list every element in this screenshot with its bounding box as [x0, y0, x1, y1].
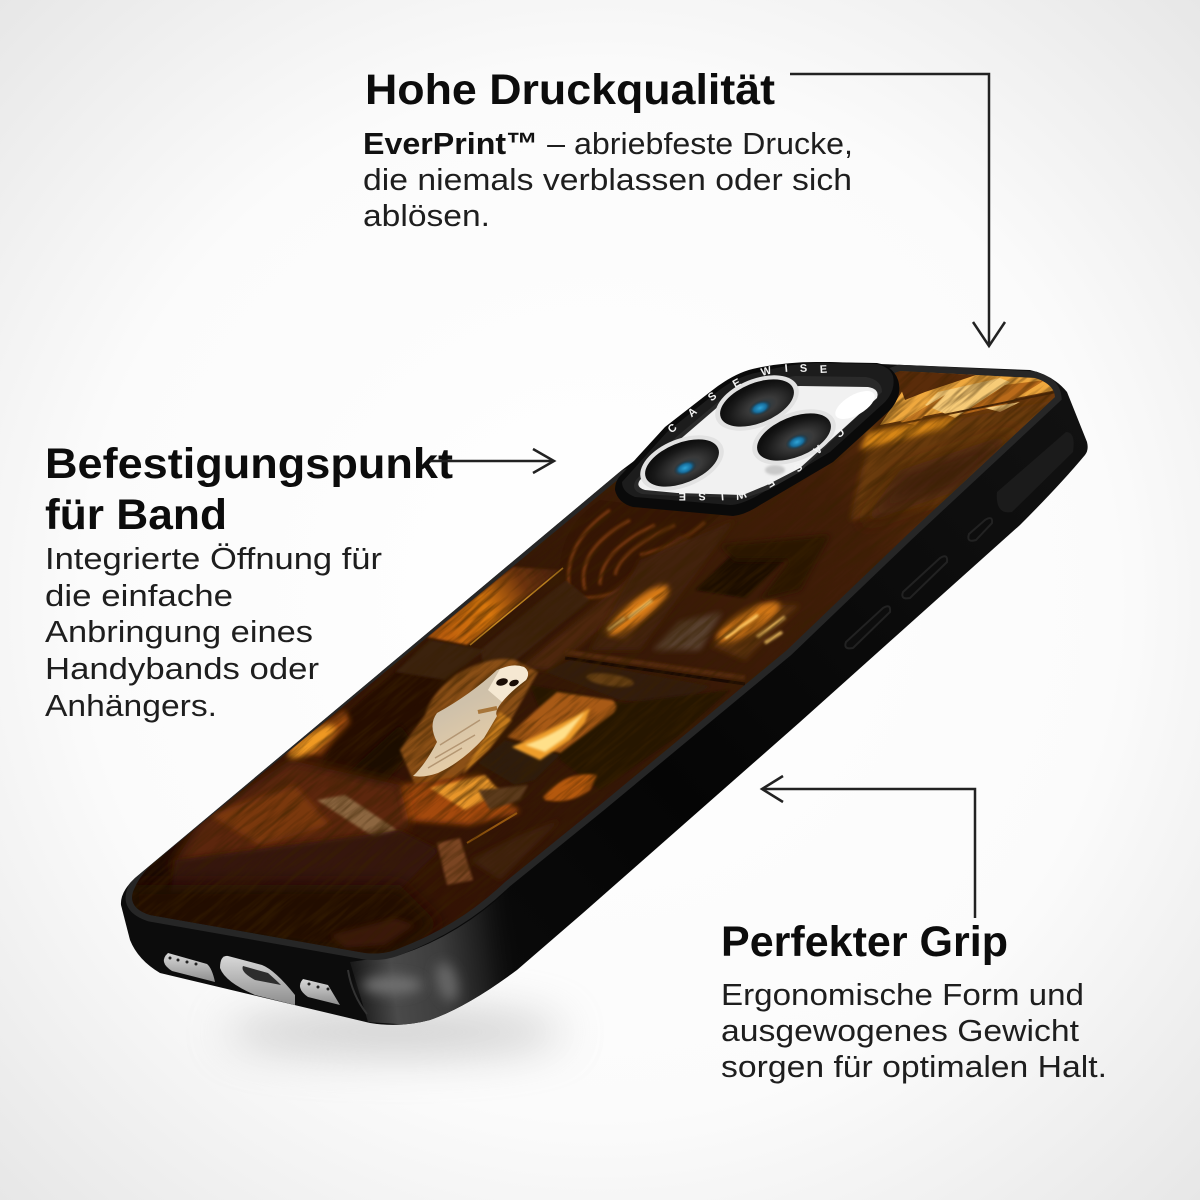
sconce left — [602, 582, 672, 640]
body: strap attachment: Integrierte Öffnung für — [45, 541, 382, 576]
side buttons — [845, 518, 992, 648]
body: strap attachment: die einfache — [45, 578, 233, 613]
body: strap attachment — [45, 541, 382, 723]
icon: ghost — [413, 665, 528, 777]
speaker grille left — [164, 953, 215, 982]
wood pillar — [520, 535, 700, 670]
dark foreground — [130, 885, 440, 960]
printed artwork — [132, 371, 1055, 954]
body: strap attachment: Anhängers. — [45, 688, 217, 723]
left glow — [284, 710, 350, 765]
stone upper left — [396, 641, 480, 680]
glowing floor — [400, 775, 520, 825]
figure — [437, 838, 473, 885]
body: print quality: die niemals verblassen oder sich — [363, 162, 852, 197]
arrow: grip — [762, 776, 975, 918]
dark mirror — [696, 556, 784, 598]
ring text top: CASEWISE — [666, 363, 827, 436]
body: grip: Ergonomische Form und — [721, 977, 1084, 1012]
stone wall — [482, 580, 590, 661]
body: grip: sorgen für optimalen Halt. — [721, 1049, 1107, 1084]
side glow — [543, 774, 597, 801]
rug — [170, 760, 410, 870]
left dark wall — [326, 672, 444, 768]
gold specks — [586, 672, 634, 688]
heading: strap attachment — [45, 440, 453, 539]
seam line — [348, 970, 367, 1014]
drape — [566, 508, 707, 600]
hearth — [490, 745, 558, 782]
body: print quality: ablösen. — [363, 198, 490, 233]
phone shadow — [225, 1008, 565, 1056]
lower floor — [170, 830, 440, 895]
body: strap attachment: Anbringung eines — [45, 614, 313, 649]
body: grip: ausgewogenes Gewicht — [721, 1013, 1079, 1048]
floor bright patch — [430, 775, 500, 810]
side grip pad — [997, 432, 1074, 512]
body: grip — [721, 977, 1107, 1084]
corner highlight — [350, 904, 500, 1024]
body: print quality — [363, 126, 853, 233]
ornate panel — [570, 660, 576, 661]
callout: grip — [721, 918, 1107, 1084]
wall panel — [427, 567, 560, 645]
top right window scene — [850, 372, 1056, 525]
mirror frame — [720, 535, 830, 600]
chair shadow — [462, 712, 512, 775]
rim around artwork — [132, 371, 1055, 953]
callout: print quality — [363, 66, 853, 233]
callout: strap attachment — [45, 440, 453, 723]
heading: print quality: Hohe Druckqualität — [365, 66, 775, 114]
lens right — [744, 398, 844, 476]
arrow: strap attachment — [430, 449, 554, 473]
charging port — [220, 956, 295, 1005]
speaker grille right — [300, 979, 340, 1005]
heading: strap attachment: für Band — [45, 491, 227, 539]
dark texture — [86, 206, 1094, 1114]
pillar between sconces — [596, 539, 708, 649]
ring text bottom: CASEWISE — [679, 425, 846, 502]
lens top — [707, 364, 807, 442]
sconce right — [710, 594, 800, 660]
chair — [400, 659, 538, 785]
fire frame — [507, 692, 616, 753]
mantel beam — [565, 652, 745, 678]
heading: strap attachment: Befestigungspunkt — [45, 440, 453, 488]
lower wall — [530, 685, 730, 790]
body: strap attachment: Handybands oder — [45, 651, 319, 686]
heading: grip: Perfekter Grip — [721, 918, 1008, 966]
right crates — [476, 826, 550, 878]
carved pattern — [210, 785, 330, 845]
gold line floor — [467, 813, 517, 843]
fire — [512, 708, 590, 760]
body: print quality: EverPrint™ – abriebfeste Drucke, — [363, 126, 853, 161]
phone case illustration — [120, 362, 1088, 1025]
books — [478, 785, 528, 810]
smoky reflection — [653, 612, 722, 650]
ladder strip — [317, 795, 397, 838]
mid left wood — [350, 730, 408, 782]
case body — [121, 362, 1088, 1025]
camera bump — [615, 362, 899, 516]
foreground stones — [330, 918, 415, 948]
gold trim line — [470, 568, 563, 645]
arrow: print quality — [790, 74, 1005, 346]
fire core — [525, 712, 585, 752]
lens left — [632, 424, 732, 502]
